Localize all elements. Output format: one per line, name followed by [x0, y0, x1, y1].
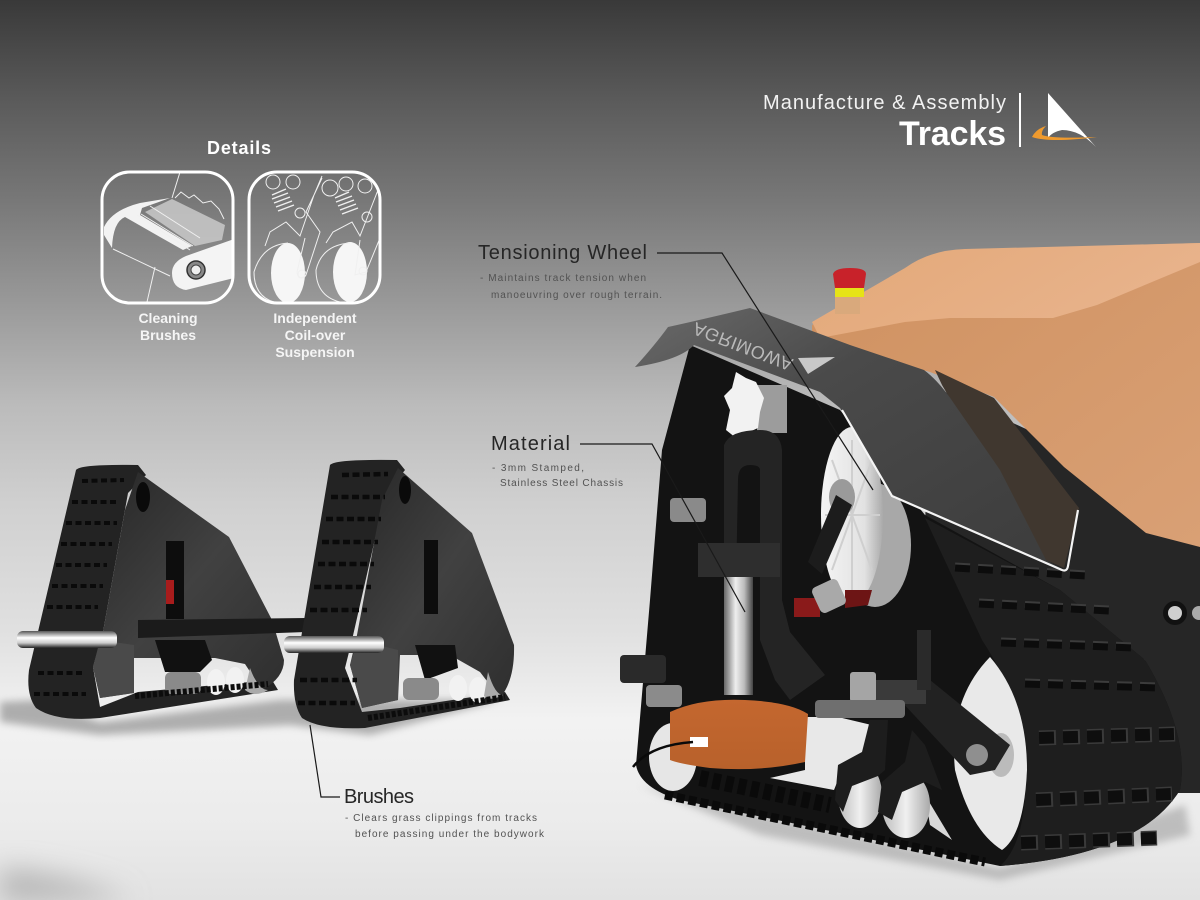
leader line	[657, 253, 873, 490]
ground lugs	[368, 697, 505, 718]
icon: brand logo	[1032, 93, 1097, 147]
bogie wheels	[835, 720, 942, 838]
description: manoeuvring over rough terrain.	[491, 290, 662, 301]
heading: details: Details	[207, 138, 271, 158]
small wheels	[155, 640, 268, 695]
track lugs	[665, 566, 1175, 862]
chrome axle	[17, 631, 117, 648]
description: - Maintains track tension when	[480, 273, 646, 284]
track belt	[294, 460, 510, 728]
lug rows	[34, 480, 124, 694]
slot	[424, 540, 438, 614]
divider	[1019, 93, 1021, 147]
icon: cleaning brushes	[102, 172, 234, 303]
mount hole	[399, 476, 411, 504]
track belt	[28, 465, 278, 719]
track unit: left	[17, 465, 306, 719]
ground lugs	[135, 684, 268, 696]
gap behind rear lugs	[925, 795, 952, 840]
suspension spring	[794, 577, 872, 617]
floor shadow: bottom-left corner	[0, 870, 130, 900]
leader line	[310, 725, 340, 797]
orange brush cylinder	[670, 700, 808, 769]
heading: tracks: Tracks	[899, 115, 1006, 153]
large front wheel	[954, 657, 1027, 850]
front coil and bolts	[815, 630, 931, 718]
mount hole	[136, 482, 150, 512]
icon: coil-over suspension	[249, 172, 380, 303]
lower plate	[350, 640, 398, 708]
orange body top surface	[812, 243, 1200, 338]
label: independent coil-over suspension: Coil-over	[285, 327, 346, 343]
track unit: right	[284, 460, 514, 728]
label: independent coil-over suspension: Suspension	[275, 344, 355, 360]
red spring	[166, 580, 174, 604]
track and interior	[636, 345, 1182, 866]
shaft collar	[698, 543, 780, 577]
description: - Clears grass clippings from tracks	[345, 813, 537, 824]
upper bolt and spring	[670, 498, 706, 522]
callout: brushes	[310, 725, 545, 840]
title: Brushes	[344, 786, 414, 808]
main machine	[620, 243, 1200, 880]
tie-rod arm	[808, 495, 852, 574]
fender panel	[935, 370, 1079, 568]
leader line	[580, 444, 745, 612]
rear white wheel	[649, 723, 697, 791]
label: cleaning brushes: Brushes	[140, 327, 196, 343]
chassis plate	[93, 472, 284, 698]
small wheels	[403, 645, 503, 703]
title: Tensioning Wheel	[478, 242, 647, 264]
right track band	[925, 518, 1182, 866]
fender	[635, 308, 1064, 570]
left bolts	[620, 655, 682, 707]
heading: manufacture and assembly: Manufacture & Assembly	[763, 92, 1006, 114]
upper white wheel	[821, 427, 911, 607]
front suspension arm	[900, 680, 1010, 775]
black wire	[633, 742, 693, 767]
description: - 3mm Stamped,	[492, 463, 584, 474]
dark lower body	[925, 385, 1200, 793]
chassis plate	[350, 468, 514, 708]
lug rows	[298, 474, 388, 703]
chrome axle	[284, 636, 384, 653]
lower plate	[93, 640, 134, 698]
cross bar	[138, 618, 306, 638]
sprocket star	[724, 372, 787, 438]
headlight	[1163, 601, 1200, 625]
description: Stainless Steel Chassis	[500, 478, 623, 489]
callout: tensioning wheel	[478, 242, 873, 490]
floor shadows: small track units	[0, 700, 500, 735]
floor shadow	[640, 785, 1190, 880]
callout: material	[491, 433, 745, 612]
chrome shaft	[724, 577, 753, 695]
ground gaps	[770, 717, 880, 790]
fender white trim	[842, 410, 1078, 570]
chassis bracket	[724, 430, 825, 700]
fender wordmark: AGRIMOWA	[690, 318, 795, 375]
emergency stop button	[833, 268, 866, 314]
slot	[166, 541, 184, 619]
header block	[763, 92, 1097, 153]
details section	[102, 138, 380, 360]
label: independent coil-over suspension: Independent	[273, 310, 357, 326]
title: Material	[491, 433, 570, 455]
front axle bolt	[966, 744, 988, 766]
label: cleaning brushes: Cleaning	[138, 310, 198, 326]
orange body side	[812, 243, 1200, 547]
description: before passing under the bodywork	[355, 829, 545, 840]
